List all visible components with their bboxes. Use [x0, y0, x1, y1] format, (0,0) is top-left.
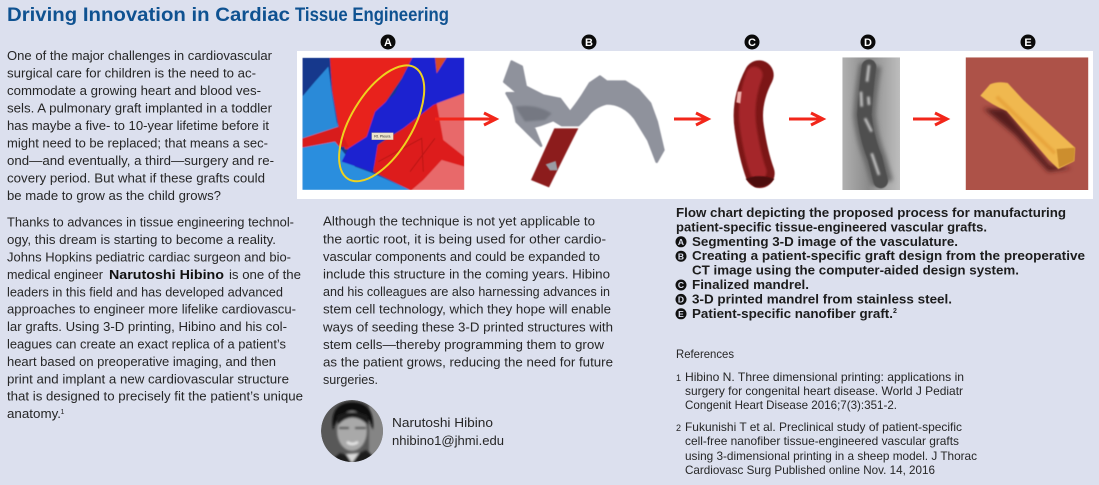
text block: intro paragraph: surgical care for children is the need to ac-: [7, 66, 256, 80]
text block: flow chart caption: Finalized mandrel.: [692, 277, 809, 292]
text block: flow chart caption: 2: [893, 308, 897, 315]
text block: Hibino paragraph: [7, 216, 303, 421]
text block: intro paragraph: One of the major challenges in cardiovascular: [7, 49, 272, 63]
references: 1: [676, 373, 681, 383]
text block: intro paragraph: might need to be replaced; that means a sec-: [7, 136, 268, 150]
badge: E: [1020, 34, 1036, 50]
title: [7, 4, 449, 26]
text block: Hibino paragraph: leagues can create an exact replica of a patient’s: [7, 338, 286, 352]
arrow: B to C: [674, 113, 708, 125]
text block: intro paragraph: covery period. But what if these grafts could: [7, 172, 265, 186]
text block: Hibino paragraph: is one of the: [229, 268, 301, 282]
tag: Rt. Pleura: [374, 134, 391, 138]
badge: A: [380, 34, 396, 50]
references: surgery for congenital heart disease. World J Pediatr: [685, 384, 963, 398]
arrow: C to D: [789, 113, 823, 125]
text block: Hibino paragraph: Thanks to advances in tissue engineering technol-: [7, 216, 294, 230]
image E: nanofiber graft: [966, 57, 1088, 190]
text block: intro paragraph: commodate a growing heart and blood ves-: [7, 84, 261, 98]
badge: C: C: [748, 37, 756, 49]
text block: flow chart caption: B: [678, 251, 684, 261]
text block: flow chart caption: Flow chart depicting the proposed process for manufacturing: [676, 205, 1066, 220]
text block: flow chart caption: patient-specific tissue-engineered vascular grafts.: [676, 219, 987, 234]
text block: intro paragraph: ond—and eventually, a third—surgery and re-: [7, 154, 274, 168]
text block: aortic root paragraph: as the patient grows, reducing the need for future: [323, 356, 613, 370]
text block: intro paragraph: [7, 49, 274, 203]
text block: aortic root paragraph: [322, 215, 613, 387]
text block: aortic root paragraph: stem cell technology, which they hope will enable: [323, 303, 611, 317]
references: Cardiovasc Surg Published online Nov. 14, 2016: [685, 463, 935, 477]
text block: intro paragraph: has maybe a five- to 10-year lifetime before it: [7, 119, 270, 133]
image C: finalized mandrel: [736, 75, 774, 187]
text block: Hibino paragraph: approaches to engineer more lifelike cardiovascu-: [7, 303, 296, 317]
contact: name and email: [392, 415, 504, 448]
badge: A: A: [384, 37, 392, 49]
text block: aortic root paragraph: include this structure in the coming years. Hibino: [323, 268, 610, 282]
text block: aortic root paragraph: and his colleagues are also harnessing advances in: [323, 285, 610, 299]
references: Fukunishi T et al. Preclinical study of patient-specific: [685, 420, 962, 434]
title: Tissue Engineering: [295, 4, 449, 26]
references: Congenit Heart Disease 2016;7(3):351-2.: [685, 398, 897, 412]
text block: Hibino paragraph: anatomy.: [7, 407, 61, 421]
text block: Hibino paragraph: medical engineer: [7, 268, 103, 282]
text block: flow chart caption: Patient-specific nanofiber graft.: [692, 306, 893, 321]
text block: Hibino paragraph: print and implant a new cardiovascular structure: [7, 372, 289, 386]
text block: Hibino paragraph: heart based on preoperative imaging, and then: [7, 355, 276, 369]
text block: Hibino paragraph: 1: [60, 409, 64, 416]
text block: flow chart caption: C: [678, 280, 684, 290]
contact: name and email: Narutoshi Hibino: [392, 415, 493, 430]
white image strip: [297, 51, 1093, 199]
image A: segmented vasculature: [302, 52, 464, 195]
badge: B: B: [585, 37, 593, 49]
text block: flow chart caption: CT image using the computer-aided design system.: [692, 263, 1019, 278]
references: References: [676, 347, 734, 361]
text block: aortic root paragraph: stem cells—thereby programming them to grow: [323, 338, 605, 352]
arrow: A to B: [435, 113, 496, 125]
text block: Hibino paragraph: that is designed to precisely fit the patient’s unique: [7, 390, 303, 404]
text block: Hibino paragraph: ogy, this dream is starting to become a reality.: [7, 233, 276, 247]
text block: Hibino paragraph: leaders in this field and has developed advanced: [7, 285, 283, 299]
text block: flow chart caption: [676, 205, 1085, 321]
image D: printed steel mandrel: [842, 57, 900, 190]
text block: Hibino paragraph: lar grafts. Using 3-D printing, Hibino and his col-: [7, 320, 287, 334]
references: using 3-dimensional printing in a sheep model. J Thorac: [685, 449, 977, 463]
text block: intro paragraph: sels. A pulmonary graft implanted in a toddler: [7, 102, 272, 116]
badge: D: D: [864, 37, 872, 49]
tag: [372, 133, 393, 140]
panel: flow chart images: [297, 51, 1093, 199]
outlined region: [338, 64, 426, 182]
portrait: Narutoshi Hibino: [321, 400, 383, 462]
text block: flow chart caption: E: [678, 309, 684, 319]
references: 2: [676, 423, 681, 433]
text block: Hibino paragraph: Johns Hopkins pediatric cardiac surgeon and bio-: [7, 250, 291, 264]
text block: aortic root paragraph: the aortic root, it is being used for other cardio-: [323, 232, 606, 246]
badge: D: [860, 34, 876, 50]
text block: intro paragraph: be made to grow as the child grows?: [7, 189, 221, 203]
text block: flow chart caption: Segmenting 3-D image of the vasculature.: [692, 234, 958, 249]
badge: C: [744, 34, 760, 50]
badge: B: [582, 34, 596, 50]
badge: E: E: [1024, 37, 1032, 49]
text block: aortic root paragraph: ways of seeding these 3-D printed structures with: [322, 320, 613, 334]
text block: aortic root paragraph: Although the technique is not yet applicable to: [323, 215, 595, 229]
text block: flow chart caption: D: [678, 295, 684, 305]
text block: flow chart caption: A: [678, 237, 684, 247]
text block: flow chart caption: Creating a patient-specific graft design from the preoperative: [692, 248, 1085, 263]
title: Driving Innovation in Cardiac: [7, 4, 290, 26]
references: Hibino N. Three dimensional printing: applications in: [685, 370, 964, 384]
image B: graft design on vessel model: [504, 62, 663, 187]
text block: flow chart caption: 3-D printed mandrel from stainless steel.: [692, 291, 952, 306]
text block: Hibino paragraph: Narutoshi Hibino: [109, 268, 224, 282]
text block: aortic root paragraph: vascular components and could be expanded to: [323, 250, 600, 264]
contact: name and email: nhibino1@jhmi.edu: [392, 433, 504, 448]
references: cell-free nanofiber tissue-engineered vascular grafts: [685, 434, 959, 448]
text block: aortic root paragraph: surgeries.: [323, 373, 378, 387]
references: [676, 347, 977, 477]
arrow: D to E: [913, 113, 947, 125]
